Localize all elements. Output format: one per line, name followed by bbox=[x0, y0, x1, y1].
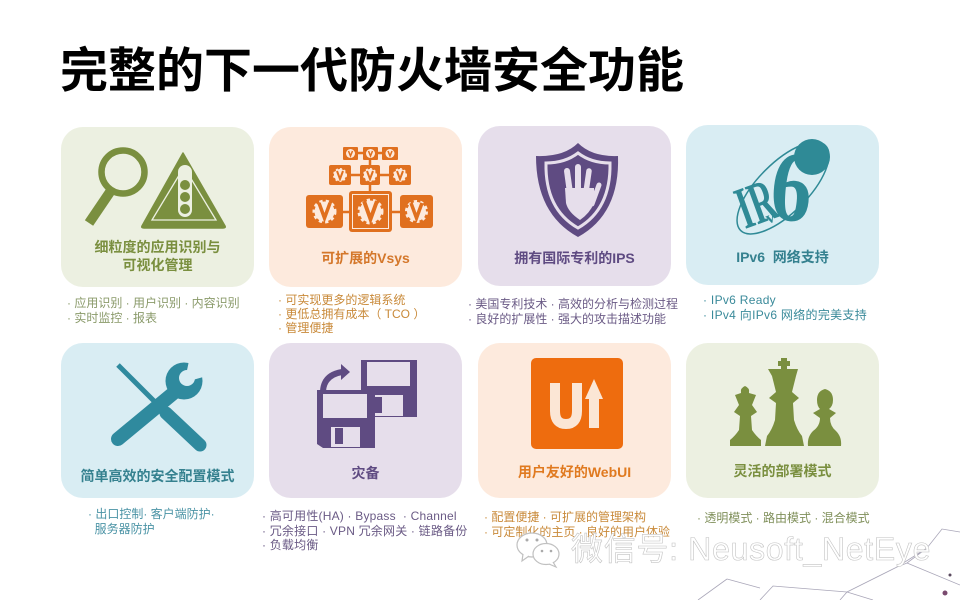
icon: Vsys gear tree bbox=[306, 147, 433, 232]
panel: friendly WebUI bbox=[478, 343, 671, 538]
heading: 可扩展的Vsys bbox=[321, 250, 410, 266]
panel: scalable Vsys bbox=[269, 127, 462, 335]
icon: IPv6 logo: 6 bbox=[766, 130, 818, 244]
panel: patented IPS bbox=[468, 126, 678, 326]
watermark text: 微信号: Neusoft_NetEye bbox=[571, 531, 931, 567]
heading: 简单高效的安全配置模式 bbox=[80, 468, 234, 484]
panel: disaster recovery bbox=[262, 343, 467, 552]
feature list: · 实时监控 · 报表 bbox=[67, 310, 157, 324]
feature list: · 透明模式 · 路由模式 · 混合模式 bbox=[697, 511, 870, 525]
heading: 灾备 bbox=[352, 465, 380, 481]
heading: 用户友好的WebUI bbox=[518, 464, 631, 480]
feature list: · 应用识别 · 用户识别 · 内容识别 bbox=[67, 296, 240, 310]
icon: IPv6 logo: IR bbox=[727, 166, 786, 241]
title: 完整的下一代防火墙安全功能 bbox=[60, 45, 684, 98]
heading bbox=[94, 239, 220, 273]
icon: IPv6 logo: v bbox=[763, 207, 778, 228]
feature list: · 美国专利技术 · 高效的分析与检测过程 bbox=[468, 297, 678, 311]
feature list: · 出口控制· 客户端防护· bbox=[88, 507, 215, 521]
feature list bbox=[703, 293, 867, 322]
icon: WeChat bubbles bbox=[516, 532, 560, 568]
feature list: · 管理便捷 bbox=[278, 321, 333, 335]
icon: shield with hand bbox=[536, 143, 618, 237]
feature list bbox=[67, 296, 240, 324]
feature list: · 负载均衡 bbox=[262, 538, 319, 552]
icon: floppy disks with arrow bbox=[317, 360, 417, 448]
feature list bbox=[262, 509, 467, 552]
icon: chess pieces bbox=[730, 358, 842, 446]
feature list bbox=[484, 510, 670, 538]
heading: 灵活的部署模式 bbox=[734, 463, 832, 479]
feature list: · 可实现更多的逻辑系统 bbox=[278, 293, 405, 307]
feature list: · IPv4 向IPv6 网络的完美支持 bbox=[703, 308, 867, 322]
panel: flexible deployment bbox=[686, 343, 879, 525]
watermark: WeChat account bbox=[516, 531, 931, 568]
heading: IPv6 网络支持 bbox=[736, 249, 829, 265]
feature list: · 冗余接口 · VPN 冗余网关 · 链路备份 bbox=[262, 524, 467, 538]
heading: 可视化管理 bbox=[122, 257, 192, 273]
feature list bbox=[468, 297, 678, 326]
feature list: · 配置便捷 · 可扩展的管理架构 bbox=[484, 510, 646, 524]
panel: IPv6 support bbox=[686, 125, 879, 322]
feature list: · IPv6 Ready bbox=[703, 293, 776, 307]
panel: application identification bbox=[61, 127, 254, 324]
icon: wrench and screwdriver bbox=[111, 362, 206, 452]
feature list: 服务器防护 bbox=[95, 522, 155, 536]
feature list: · 可定制化的主页 · 良好的用户体验 bbox=[484, 524, 670, 538]
heading: 拥有国际专利的IPS bbox=[514, 250, 635, 266]
decorative network lines bbox=[698, 528, 960, 600]
feature list: · 更低总拥有成本（ TCO ） bbox=[278, 307, 425, 321]
feature list bbox=[88, 507, 215, 536]
feature list: · 高可用性(HA) · Bypass · Channel bbox=[262, 509, 457, 523]
feature list: · 良好的扩展性 · 强大的攻击描述功能 bbox=[468, 312, 666, 326]
icon: magnifier and warning triangle bbox=[84, 147, 226, 229]
feature list bbox=[278, 293, 425, 335]
panel: security configuration bbox=[61, 343, 254, 536]
icon: IPv6 logo bbox=[727, 130, 830, 244]
heading: 细粒度的应用识别与 bbox=[94, 239, 220, 255]
icon: UI upgrade tile bbox=[531, 358, 623, 449]
